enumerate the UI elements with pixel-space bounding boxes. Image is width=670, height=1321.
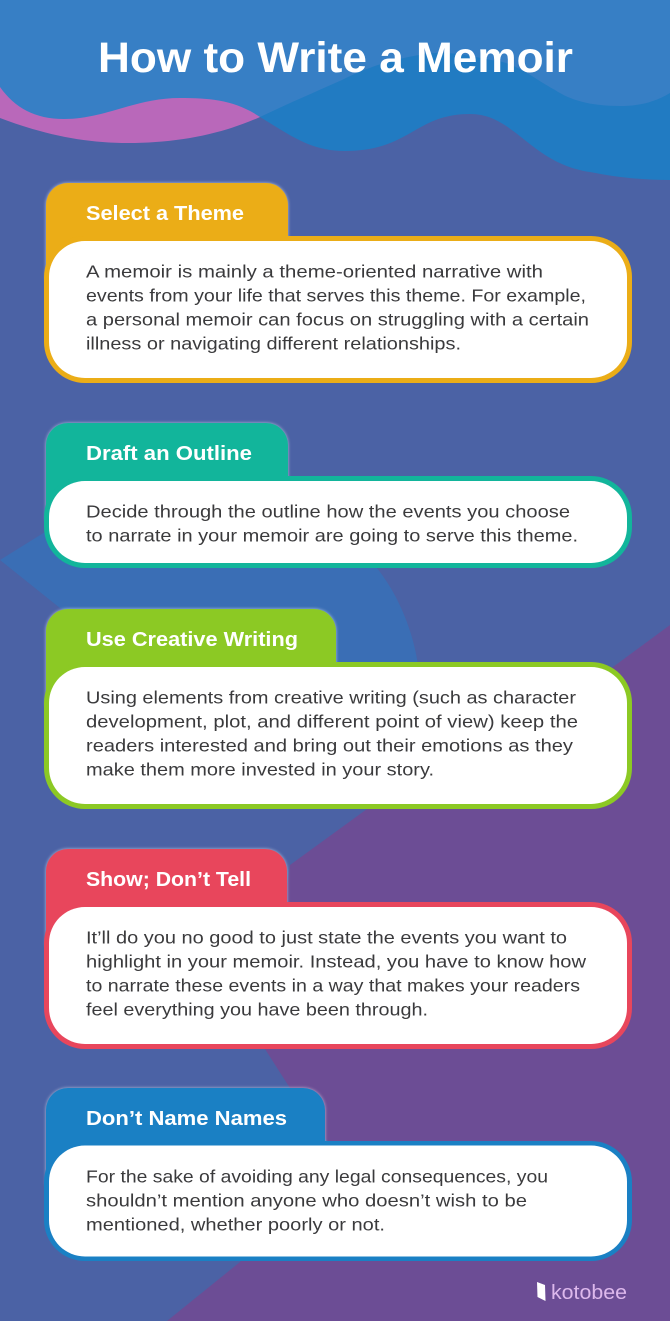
background: pink wave — [0, 80, 260, 143]
tab glow — [46, 609, 336, 706]
card border — [44, 662, 632, 809]
tab — [46, 849, 287, 946]
wordmark: kotobee — [551, 1282, 627, 1304]
background: lower purple shape — [167, 625, 670, 1321]
body text: illness or navigating different relationships. — [86, 333, 461, 353]
tab — [46, 183, 288, 280]
heading: Select a Theme — [86, 203, 244, 225]
card border — [44, 236, 632, 383]
body text: It’ll do you no good to just state the events you want to — [86, 927, 567, 947]
icon: book — [537, 1282, 546, 1301]
card — [49, 667, 627, 804]
title: How to Write a Memoir — [98, 34, 573, 82]
body text — [86, 1167, 548, 1235]
heading: Use Creative Writing — [86, 629, 298, 651]
heading: Don’t Name Names — [86, 1108, 287, 1130]
body text — [86, 261, 589, 353]
body text: development, plot, and different point of view) keep the — [86, 711, 578, 731]
card — [49, 1146, 627, 1256]
body text: to narrate in your memoir are going to serve this theme. — [86, 525, 578, 545]
tab glow — [46, 849, 287, 946]
background: middle blue shape — [0, 520, 418, 720]
body text — [86, 687, 578, 779]
panel: show, don't tell — [44, 849, 632, 1049]
tab glow — [46, 1088, 325, 1185]
body text: shouldn’t mention anyone who doesn’t wish to be — [86, 1191, 527, 1211]
body text: Decide through the outline how the events you choose — [86, 501, 570, 521]
card — [49, 481, 627, 563]
body text: make them more invested in your story. — [86, 759, 434, 779]
body text: events from your life that serves this theme. For example, — [86, 285, 586, 305]
heading: Draft an Outline — [86, 443, 252, 465]
card border — [44, 902, 632, 1049]
tab — [46, 423, 288, 520]
body text: Using elements from creative writing (such as character — [86, 687, 576, 707]
background: dark blue wave — [260, 40, 670, 180]
body text: A memoir is mainly a theme-oriented narrative with — [86, 261, 543, 281]
tab glow — [46, 423, 288, 520]
body text — [86, 501, 578, 545]
body text: a personal memoir can focus on struggling with a certain — [86, 309, 589, 329]
logo: kotobee — [537, 1282, 627, 1304]
body text: For the sake of avoiding any legal consequences, you — [86, 1167, 548, 1187]
tab glow — [46, 183, 288, 280]
card border — [44, 476, 632, 568]
card — [49, 241, 627, 378]
panel: draft an outline — [44, 423, 632, 568]
heading: Show; Don’t Tell — [86, 869, 251, 891]
background: light blue wave — [0, 0, 670, 119]
panel: don't name names — [44, 1088, 632, 1261]
body text: highlight in your memoir. Instead, you have to know how — [86, 951, 586, 971]
tab — [46, 1088, 325, 1185]
body text: readers interested and bring out their emotions as they — [86, 735, 573, 755]
body text: feel everything you have been through. — [86, 999, 428, 1019]
tab — [46, 609, 336, 706]
panel: select a theme — [44, 183, 632, 383]
body text: to narrate these events in a way that makes your readers — [86, 975, 580, 995]
body text — [86, 927, 586, 1019]
card border — [44, 1141, 632, 1261]
body text: mentioned, whether poorly or not. — [86, 1215, 385, 1235]
panel: use creative writing — [44, 609, 632, 809]
card — [49, 907, 627, 1044]
